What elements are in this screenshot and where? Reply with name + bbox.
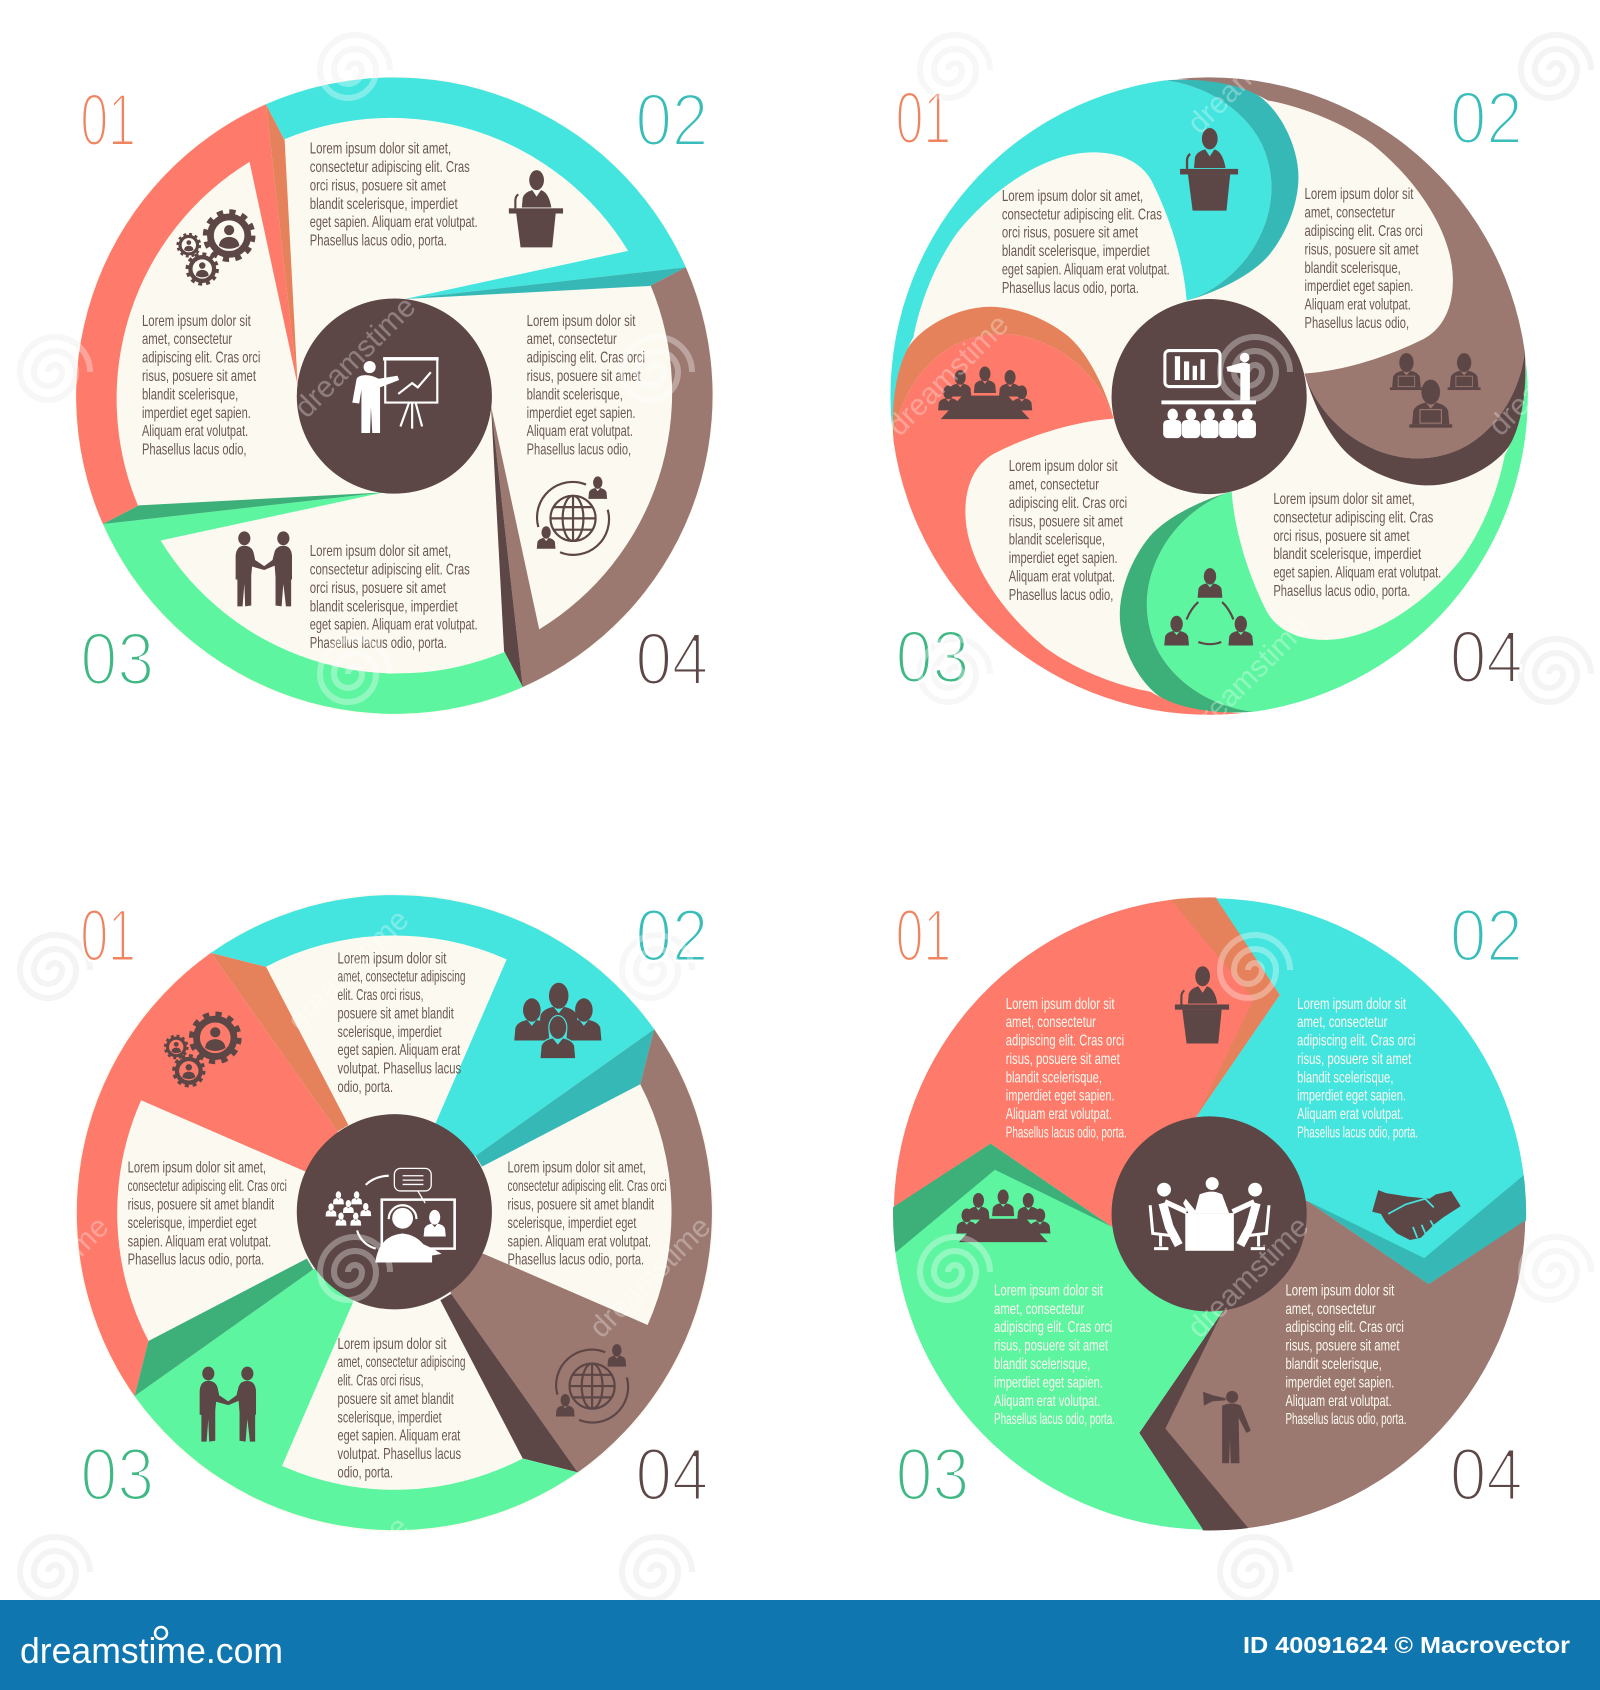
text block: brown segment: imperdiet eget sapien.	[1305, 278, 1413, 295]
segment 01 coral	[77, 953, 351, 1396]
footer bar	[0, 1600, 1600, 1690]
text block: right segment: Aliquam erat volutpat.	[527, 423, 633, 440]
text block: brown segment: risus, posuere sit amet	[1305, 241, 1419, 258]
icon: two men shaking hands	[200, 1367, 256, 1442]
segment 01 coral	[76, 104, 298, 524]
text block: teal segment: Phasellus lacus odio, porta.	[1297, 1125, 1418, 1142]
number 03: 03	[80, 1432, 154, 1516]
center circle	[297, 299, 492, 494]
text block: coral segment: Phasellus lacus odio,	[1009, 587, 1113, 604]
icon: team cycle triangle	[1164, 568, 1253, 645]
text block: coral segment: amet, consectetur	[1009, 477, 1099, 494]
number 01: 01	[80, 77, 136, 161]
number 01: 01	[896, 75, 951, 159]
text block: brown segment: risus, posuere sit amet	[1285, 1338, 1400, 1355]
text block: bottom segment: volutpat. Phasellus lacus	[338, 1446, 461, 1463]
text block: coral segment: blandit scelerisque,	[1009, 532, 1105, 549]
text block: right segment: sapien. Aliquam erat volutpat.	[508, 1233, 651, 1250]
number 04: 04	[1450, 1432, 1523, 1516]
icon: speaker at podium	[509, 170, 563, 247]
text block: right segment: risus, posuere sit amet	[527, 368, 641, 385]
text block: top segment: elit. Cras orci risus,	[338, 987, 423, 1004]
text block: right segment: amet, consectetur	[527, 331, 617, 348]
icon: man with megaphone	[1203, 1391, 1251, 1463]
text block: bottom segment: orci risus, posuere sit amet	[310, 580, 446, 597]
segment 01 coral	[894, 895, 1280, 1227]
number 02: 02	[635, 77, 708, 161]
segment 02 teal	[1197, 898, 1528, 1284]
filled segments	[891, 895, 1528, 1533]
number 03: 03	[896, 1432, 969, 1516]
text block: top segment: blandit scelerisque, imperdiet	[310, 196, 458, 213]
number 02: 02	[1450, 893, 1523, 977]
text block: bottom segment: consectetur adipiscing elit. Cras	[310, 562, 470, 579]
text block: right segment: adipiscing elit. Cras orci	[527, 350, 645, 367]
text block: coral segment: adipiscing elit. Cras orci	[1006, 1033, 1124, 1050]
text block: green segment: risus, posuere sit amet	[994, 1338, 1109, 1355]
cream disc	[75, 893, 714, 1532]
text block: coral segment: adipiscing elit. Cras orci	[1009, 495, 1127, 512]
text block: top segment	[338, 950, 465, 1096]
text block: green segment: amet, consectetur	[994, 1301, 1084, 1318]
text block: coral segment: amet, consectetur	[1006, 1014, 1096, 1031]
text block: brown segment: Lorem ipsum dolor sit	[1285, 1282, 1395, 1299]
number 01: 01	[80, 893, 136, 977]
text block: bottom segment: elit. Cras orci risus,	[338, 1373, 423, 1390]
panel: pinwheel circle, top left	[75, 76, 714, 715]
text block: top segment: volutpat. Phasellus lacus	[338, 1061, 461, 1078]
icon: speaker at podium	[1175, 966, 1229, 1043]
text block: green segment: orci risus, posuere sit amet	[1273, 528, 1410, 545]
watermark overlay: dreamstime	[281, 1510, 415, 1644]
text block: teal segment: eget sapien. Aliquam erat volutpat.	[1002, 261, 1170, 278]
text block: bottom segment	[338, 1336, 465, 1482]
text block: brown segment	[1305, 186, 1423, 332]
text block: left segment: risus, posuere sit amet	[142, 368, 256, 385]
watermark overlay: dreamstime	[288, 290, 422, 424]
icon: video conference with network	[326, 1168, 455, 1262]
segment 03 green	[135, 1256, 578, 1530]
text block: left segment: adipiscing elit. Cras orci	[142, 350, 260, 367]
icon: meeting table	[938, 367, 1032, 419]
text block: top segment: orci risus, posuere sit amet	[310, 177, 446, 194]
watermark overlay: dreamstime	[1181, 1210, 1315, 1344]
text block: top segment: posuere sit amet blandit	[338, 1005, 454, 1022]
text block: coral segment: Phasellus lacus odio, porta.	[1006, 1125, 1127, 1142]
text block: brown segment: imperdiet eget sapien.	[1285, 1374, 1394, 1391]
icon: speaker with chart and audience	[1161, 351, 1256, 438]
text block: teal segment: orci risus, posuere sit amet	[1002, 225, 1138, 242]
text block: right segment: imperdiet eget sapien.	[527, 405, 635, 422]
segment green	[1147, 364, 1528, 712]
icon: globe with people	[556, 1344, 628, 1423]
text block: left segment: Aliquam erat volutpat.	[142, 423, 248, 440]
text block: top segment: consectetur adipiscing elit. Cras	[310, 159, 470, 176]
text block: coral segment: Lorem ipsum dolor sit	[1006, 996, 1115, 1013]
text block: bottom segment: eget sapien. Aliquam erat volutpat.	[310, 617, 478, 634]
text block: teal segment: risus, posuere sit amet	[1297, 1051, 1412, 1068]
icon: presenter at chart board	[352, 357, 439, 433]
segment 04 brown	[1139, 1201, 1525, 1533]
text block: teal segment	[1002, 188, 1170, 297]
icon: three people at a table	[1150, 1177, 1269, 1251]
text block: green segment: blandit scelerisque, imperdiet	[1273, 546, 1422, 563]
icon: globe with people	[537, 476, 609, 555]
text block: left segment: scelerisque, imperdiet eget	[128, 1215, 257, 1232]
text block: top segment: amet, consectetur adipiscing	[338, 969, 465, 986]
text block: left segment: risus, posuere sit amet blandit	[128, 1197, 275, 1214]
text block: bottom segment	[310, 543, 478, 652]
text block: coral segment: blandit scelerisque,	[1006, 1069, 1102, 1086]
watermark overlay: dreamstime	[281, 903, 415, 1037]
text block: green segment: eget sapien. Aliquam erat volutpat.	[1273, 565, 1441, 582]
text block: left segment: sapien. Aliquam erat volutpat.	[128, 1233, 271, 1250]
footer logo: dreamstime.com	[20, 1630, 283, 1671]
text block: brown segment	[1285, 1282, 1406, 1428]
watermark overlay: dreamstime	[583, 1210, 717, 1344]
icon: team group	[514, 983, 601, 1059]
segment 04 brown	[491, 267, 713, 687]
text block: bottom segment: Lorem ipsum dolor sit	[338, 1336, 447, 1353]
text block: teal segment: consectetur adipiscing elit. Cras	[1002, 206, 1162, 223]
text block: coral segment: imperdiet eget sapien.	[1009, 550, 1118, 567]
text block: bottom segment: Lorem ipsum dolor sit amet,	[310, 543, 451, 560]
text block: teal segment: blandit scelerisque, imperdiet	[1002, 243, 1150, 260]
text block: top segment: eget sapien. Aliquam erat	[338, 1042, 461, 1059]
segment 04 brown	[438, 1029, 712, 1472]
text block: right segment: Lorem ipsum dolor sit	[527, 313, 636, 330]
text block: coral segment: Aliquam erat volutpat.	[1006, 1106, 1112, 1123]
text block: top segment: Lorem ipsum dolor sit	[338, 950, 447, 967]
number 02: 02	[1450, 75, 1523, 159]
text block: left segment: Phasellus lacus odio, porta.	[128, 1252, 264, 1269]
text block: coral segment: Aliquam erat volutpat.	[1009, 568, 1115, 585]
icon: speaker at podium	[1180, 128, 1238, 211]
text block: left segment: Lorem ipsum dolor sit	[142, 313, 251, 330]
text block: teal segment: amet, consectetur	[1297, 1014, 1387, 1031]
number 03: 03	[80, 616, 154, 700]
text block: right segment	[508, 1160, 667, 1269]
icon: gears with people	[165, 1014, 239, 1086]
cream disc	[890, 77, 1528, 715]
text block: left segment: consectetur adipiscing elit. Cras orci	[128, 1178, 287, 1195]
text block: top segment: Lorem ipsum dolor sit amet,	[310, 141, 451, 158]
panel: wedge circle, bottom left	[75, 893, 714, 1532]
text block: left segment	[142, 313, 260, 459]
text block: coral segment	[1009, 458, 1127, 604]
number 04: 04	[635, 616, 708, 700]
text block: green segment: imperdiet eget sapien.	[994, 1374, 1103, 1391]
text block: bottom segment: blandit scelerisque, imperdiet	[310, 598, 458, 615]
icon: meeting table	[956, 1190, 1050, 1242]
text block: bottom segment: Phasellus lacus odio, porta.	[310, 635, 447, 652]
icon: clasped hands	[1372, 1190, 1461, 1240]
text block: bottom segment: eget sapien. Aliquam erat	[338, 1428, 461, 1445]
text block: coral segment: risus, posuere sit amet	[1006, 1051, 1120, 1068]
text block: brown segment: Phasellus lacus odio,	[1305, 315, 1409, 332]
cream disc	[75, 76, 714, 715]
text block: right segment: consectetur adipiscing elit. Cras orci	[508, 1178, 667, 1195]
text block: teal segment: Lorem ipsum dolor sit amet,	[1002, 188, 1143, 205]
text block: brown segment: adipiscing elit. Cras orci	[1305, 223, 1423, 240]
text block: right segment	[527, 313, 645, 459]
watermark overlay: dreamstime	[1181, 6, 1315, 140]
text block: teal segment: adipiscing elit. Cras orci	[1297, 1033, 1416, 1050]
segment 03 green	[103, 492, 523, 714]
text block: right segment: Lorem ipsum dolor sit amet,	[508, 1160, 646, 1177]
text block: top segment: scelerisque, imperdiet	[338, 1024, 442, 1041]
icon: gears with people	[178, 212, 253, 284]
text block: teal segment: Phasellus lacus odio, porta.	[1002, 280, 1139, 297]
segment 02 teal	[266, 77, 686, 299]
text block: green segment	[994, 1282, 1115, 1428]
text block: coral segment	[1006, 996, 1127, 1142]
segment 02 teal	[211, 895, 654, 1169]
segment teal	[890, 80, 1271, 429]
panel: swirl circle, top right	[890, 75, 1528, 715]
text block: right segment: Phasellus lacus odio, porta.	[508, 1252, 644, 1269]
text block: brown segment: amet, consectetur	[1305, 205, 1395, 222]
fold crescents	[893, 80, 1525, 712]
text block: right segment: scelerisque, imperdiet eget	[508, 1215, 637, 1232]
center circle	[1112, 1116, 1307, 1312]
center circle	[297, 1114, 492, 1309]
text block: brown segment: Phasellus lacus odio, porta.	[1285, 1411, 1406, 1428]
text block: teal segment	[1297, 996, 1418, 1142]
text block: brown segment: amet, consectetur	[1285, 1301, 1376, 1318]
text block: green segment: Lorem ipsum dolor sit	[994, 1282, 1103, 1299]
center circle	[1112, 299, 1307, 494]
text block: bottom segment: amet, consectetur adipiscing	[338, 1354, 465, 1371]
text block: left segment: imperdiet eget sapien.	[142, 405, 251, 422]
segment brown	[1177, 77, 1525, 458]
text block: left segment: blandit scelerisque,	[142, 386, 238, 403]
text block: green segment: Lorem ipsum dolor sit amet,	[1273, 491, 1415, 508]
panel: filled circle, bottom right	[891, 893, 1528, 1533]
text block: right segment: blandit scelerisque,	[527, 386, 623, 403]
text block: teal segment: imperdiet eget sapien.	[1297, 1088, 1406, 1105]
number 01: 01	[896, 893, 951, 977]
text block: brown segment: Aliquam erat volutpat.	[1305, 297, 1411, 314]
text block: green segment	[1273, 491, 1441, 600]
text block: green segment: Phasellus lacus odio, porta.	[994, 1411, 1115, 1428]
text block: green segment: Aliquam erat volutpat.	[994, 1393, 1100, 1410]
footer credit: ID 40091624 © Macrovector	[1243, 1632, 1570, 1658]
text block: bottom segment: scelerisque, imperdiet	[338, 1409, 442, 1426]
number 04: 04	[1450, 614, 1523, 698]
text block: brown segment: adipiscing elit. Cras orci	[1285, 1319, 1404, 1336]
text block: coral segment: risus, posuere sit amet	[1009, 513, 1123, 530]
number 04: 04	[635, 1432, 708, 1516]
number 02: 02	[635, 893, 708, 977]
watermark overlay: dreamstime	[881, 308, 1015, 442]
segment 03 green	[891, 1144, 1223, 1530]
text block: right segment: risus, posuere sit amet blandit	[508, 1197, 655, 1214]
text block: teal segment: Lorem ipsum dolor sit	[1297, 996, 1406, 1013]
text block: left segment: amet, consectetur	[142, 331, 232, 348]
text block: brown segment: blandit scelerisque,	[1305, 260, 1401, 277]
text block: coral segment: imperdiet eget sapien.	[1006, 1088, 1115, 1105]
text block: brown segment: Aliquam erat volutpat.	[1285, 1393, 1392, 1410]
text block: top segment	[310, 141, 478, 250]
text block: top segment: odio, porta.	[338, 1079, 393, 1096]
text block: green segment: Phasellus lacus odio, porta.	[1273, 583, 1410, 600]
text block: brown segment: blandit scelerisque,	[1285, 1356, 1382, 1373]
text block: bottom segment: odio, porta.	[338, 1465, 393, 1482]
text block: right segment: Phasellus lacus odio,	[527, 442, 631, 459]
text block: top segment: eget sapien. Aliquam erat volutpat.	[310, 214, 478, 231]
text block: green segment: consectetur adipiscing elit. Cras	[1273, 509, 1433, 526]
segment coral	[893, 334, 1242, 715]
text block: bottom segment: posuere sit amet blandit	[338, 1391, 454, 1408]
number 03: 03	[896, 614, 969, 698]
text block: green segment: adipiscing elit. Cras orci	[994, 1319, 1112, 1336]
text block: teal segment: Aliquam erat volutpat.	[1297, 1106, 1403, 1123]
text block: teal segment: blandit scelerisque,	[1297, 1069, 1393, 1086]
icon: two men shaking hands	[236, 531, 292, 606]
text block: coral segment: Lorem ipsum dolor sit	[1009, 458, 1118, 475]
watermark overlay: dreamstime	[1181, 610, 1315, 744]
text block: brown segment: Lorem ipsum dolor sit	[1305, 186, 1414, 203]
icon: three people at desks	[1390, 353, 1481, 428]
text block: top segment: Phasellus lacus odio, porta.	[310, 233, 447, 250]
text block: green segment: blandit scelerisque,	[994, 1356, 1090, 1373]
text block: left segment	[128, 1160, 287, 1269]
text block: left segment: Phasellus lacus odio,	[142, 442, 246, 459]
text block: left segment: Lorem ipsum dolor sit amet,	[128, 1160, 266, 1177]
